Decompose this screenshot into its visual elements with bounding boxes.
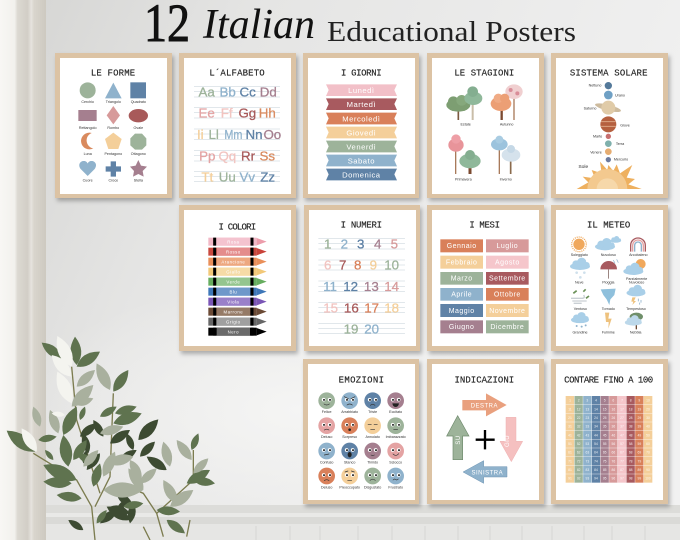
number grid: 36 — [611, 425, 615, 429]
icon: nuvoloso: Nuvoloso — [601, 253, 616, 257]
numbers: 2 — [341, 237, 348, 252]
face labels: Deluso — [321, 485, 332, 489]
face labels: Triste — [368, 410, 377, 414]
number grid: 94 — [594, 477, 598, 481]
number grid: 38 — [629, 425, 633, 429]
month tiles: Maggio — [449, 308, 475, 315]
alphabet letters: Ss — [260, 148, 275, 163]
number grid: 37 — [620, 425, 624, 429]
number grid: 72 — [577, 459, 581, 463]
planets: Giove — [620, 124, 630, 128]
number grid: 20 — [646, 407, 650, 411]
number grid: 45 — [603, 433, 607, 437]
alphabet letters: Vv — [240, 169, 255, 184]
icon: tornado: Tornado — [602, 307, 615, 311]
ruled lines — [318, 238, 405, 334]
numbers: 11 — [323, 279, 337, 294]
heading: i giorni: I GIORNI — [341, 69, 382, 79]
numbers: 8 — [354, 258, 361, 273]
alphabet letters: Oo — [263, 127, 281, 142]
number grid: 63 — [585, 451, 589, 455]
number grid: 96 — [611, 477, 615, 481]
shapes grid: Croce — [108, 179, 118, 183]
number grid: 35 — [603, 425, 607, 429]
number grid: 81 — [568, 468, 572, 472]
number grid: 46 — [611, 433, 615, 437]
number grid: 23 — [585, 416, 589, 420]
number grid: 82 — [577, 468, 581, 472]
number grid: 77 — [620, 459, 624, 463]
face labels: Eccitato — [389, 410, 402, 414]
alphabet letters: Tt — [201, 169, 214, 184]
shapes grid: Ovale — [134, 126, 143, 130]
number grid: 41 — [568, 433, 572, 437]
number grid: 3 — [586, 399, 588, 403]
numbers: 19 — [344, 321, 358, 336]
number grid: 75 — [603, 459, 607, 463]
number grid: 86 — [611, 468, 615, 472]
panel: le stagioni — [427, 53, 544, 198]
number grid: 64 — [594, 451, 598, 455]
number grid: 43 — [585, 433, 589, 437]
number grid: 85 — [603, 468, 607, 472]
month tiles: Luglio — [497, 243, 518, 250]
crayons: Grigio — [226, 319, 241, 324]
number grid: 83 — [585, 468, 589, 472]
number grid: 44 — [594, 433, 598, 437]
planets: Terra — [616, 142, 625, 146]
icon: pioggia: Pioggia — [602, 281, 615, 285]
planets: Mercurio — [614, 158, 628, 162]
number grid: 98 — [629, 477, 633, 481]
numbers — [323, 237, 400, 336]
arrow: giù: GIÙ — [504, 435, 511, 447]
numbers: 1 — [324, 237, 331, 252]
shapes grid: Ottagono — [131, 152, 146, 156]
number grid: 16 — [611, 407, 615, 411]
number grid: 93 — [585, 477, 589, 481]
number grid: 49 — [637, 433, 641, 437]
face labels: Annoiato — [365, 435, 380, 439]
number grid: 71 — [568, 459, 572, 463]
number grid: 15 — [603, 407, 607, 411]
planets: Saturno — [584, 106, 596, 110]
heading: le stagioni: LE STAGIONI — [454, 69, 514, 79]
day ribbons — [326, 84, 397, 180]
number grid: 34 — [594, 425, 598, 429]
number grid: 66 — [611, 451, 615, 455]
icon: temporale: Tempestoso — [626, 307, 646, 311]
face labels: Confuso — [320, 460, 333, 464]
number grid: 19 — [637, 407, 641, 411]
month tiles: Agosto — [495, 259, 520, 266]
alphabet letters: Dd — [260, 85, 277, 100]
face labels: Stanco — [344, 460, 355, 464]
wainscot moulding — [46, 505, 680, 540]
alphabet letters: Rr — [241, 148, 256, 163]
number grid: 95 — [603, 477, 607, 481]
numbers: 13 — [364, 279, 379, 294]
crayons: Arancione — [221, 259, 245, 264]
numbers: 3 — [357, 237, 364, 252]
alphabet letters: Uu — [219, 169, 236, 184]
alphabet letters: Ii — [197, 127, 204, 142]
ruled lines — [194, 87, 280, 182]
day ribbons: Mercoledì — [342, 114, 380, 123]
heading: indicazioni: INDICAZIONI — [454, 375, 514, 385]
panel: il meteo — [551, 205, 668, 351]
face labels: Felice — [322, 410, 332, 414]
number grid: 26 — [611, 416, 615, 420]
month tiles: Gennaio — [447, 243, 477, 250]
planets: Urano — [615, 94, 625, 98]
icon: parzialmente nuvoloso: Parzialmente — [626, 277, 647, 281]
month tiles: Novembre — [489, 308, 525, 315]
planets: Venere — [590, 151, 602, 155]
number grid: 21 — [568, 416, 572, 420]
number grid: 76 — [611, 459, 615, 463]
planets — [584, 82, 630, 162]
wall light — [20, 280, 580, 540]
number grid: 12 — [577, 407, 581, 411]
number grid: 25 — [603, 416, 607, 420]
number grid: 57 — [620, 442, 624, 446]
day ribbons: Martedì — [347, 100, 376, 109]
number grid — [566, 396, 652, 483]
face labels: Disgustato — [364, 485, 381, 489]
number grid: 73 — [585, 459, 589, 463]
number grid: 91 — [568, 477, 572, 481]
number grid: 28 — [629, 416, 633, 420]
title: Educational Posters — [327, 16, 576, 48]
number grid: 14 — [594, 407, 598, 411]
planets: Marte — [593, 134, 602, 138]
number grid: 30 — [646, 416, 650, 420]
heading: sistema solare: SISTEMA SOLARE — [570, 69, 647, 79]
face grid — [318, 392, 404, 484]
alphabet letters: Ll — [208, 127, 219, 142]
panel: emozioni — [303, 359, 419, 504]
panel: le forme — [55, 53, 172, 198]
numbers: 5 — [391, 237, 398, 252]
number grid: 8 — [630, 399, 632, 403]
number grid: 11 — [568, 407, 572, 411]
month tiles: Febbraio — [446, 259, 477, 266]
panel: l'alfabeto — [179, 53, 296, 198]
number grid: 13 — [585, 407, 589, 411]
icon: fulmine: Fulmine — [602, 331, 615, 335]
panel: i numeri — [304, 205, 420, 351]
number grid: 60 — [646, 442, 650, 446]
face labels: Deluso — [321, 435, 332, 439]
planets: Nettuno — [589, 84, 601, 88]
crayons: Blu — [229, 289, 237, 294]
plant — [3, 333, 216, 540]
number grid: 54 — [594, 442, 598, 446]
month tiles — [440, 239, 529, 333]
title: Italian — [202, 2, 315, 48]
number grid: 6 — [612, 399, 614, 403]
number grid: 33 — [585, 425, 589, 429]
number grid: 18 — [629, 407, 633, 411]
number grid: 61 — [568, 451, 572, 455]
alphabet letters: Pp — [199, 148, 215, 163]
shapes grid: Triangolo — [106, 100, 121, 104]
number grid: 40 — [646, 425, 650, 429]
numbers: 17 — [364, 300, 379, 315]
label: sole: Sole — [578, 164, 589, 170]
number grid: 27 — [620, 416, 624, 420]
number grid: 17 — [620, 407, 624, 411]
arrow: sinistra: SINISTRA — [472, 470, 503, 476]
number grid: 24 — [594, 416, 598, 420]
alphabet letters: Mm — [224, 127, 242, 142]
face labels: Imbarazzato — [386, 435, 406, 439]
number grid: 65 — [603, 451, 607, 455]
alphabet letters: Aa — [199, 85, 215, 100]
number grid: 47 — [620, 433, 624, 437]
day ribbons: Venerdì — [346, 142, 376, 151]
shapes grid — [78, 82, 148, 183]
panel: sistema solare — [551, 53, 668, 198]
icon: sole: Soleggiato — [571, 253, 588, 257]
alphabet letters: Zz — [260, 169, 275, 184]
number grid: 97 — [620, 477, 624, 481]
icon: nebbia: Nebbia — [630, 331, 642, 335]
number grid: 50 — [646, 433, 650, 437]
face labels: Timido — [367, 460, 378, 464]
number grid: 92 — [577, 477, 581, 481]
number grid: 39 — [637, 425, 641, 429]
numbers: 6 — [324, 258, 331, 273]
numbers: 20 — [364, 321, 379, 336]
number grid: 22 — [577, 416, 581, 420]
panel: i colori — [179, 205, 296, 351]
icon: arcobaleno: Arcobaleno — [629, 253, 648, 257]
icon: sun — [577, 162, 642, 189]
number grid: 70 — [646, 451, 650, 455]
arrow: destra: DESTRA — [471, 403, 498, 409]
trees: inverno: Inverno — [500, 177, 512, 181]
number grid: 90 — [646, 468, 650, 472]
icon: neve: Neve — [575, 281, 584, 285]
number grid: 78 — [629, 459, 633, 463]
number grid: 99 — [637, 477, 641, 481]
alphabet letters: Gg — [238, 106, 256, 121]
number grid: 4 — [595, 399, 597, 403]
arrow: su: SU — [456, 435, 462, 445]
month tiles: Giugno — [449, 324, 474, 331]
number grid: 1 — [569, 399, 571, 403]
panel: contare fino a 100 — [551, 359, 668, 504]
number grid: 31 — [568, 425, 572, 429]
number grid: 88 — [629, 468, 633, 472]
face labels: Preoccupato — [339, 485, 360, 489]
number grid: 56 — [611, 442, 615, 446]
crayons: Marrone — [224, 309, 243, 314]
face labels — [320, 410, 406, 489]
shapes grid: Luna — [84, 152, 93, 156]
panel: i mesi — [427, 205, 544, 351]
number grid: 67 — [620, 451, 624, 455]
number grid: 87 — [620, 468, 624, 472]
heading: l'alfabeto: L´ALFABETO — [209, 69, 265, 79]
day ribbons: Lunedì — [348, 86, 375, 95]
number grid: 79 — [637, 459, 641, 463]
alphabet letters: Ff — [221, 106, 233, 121]
number grid: 89 — [637, 468, 641, 472]
alphabet letters — [197, 85, 281, 184]
trees: primavera: Primavera — [455, 177, 473, 181]
day ribbons: Sabato — [348, 156, 375, 165]
heading: le forme: LE FORME — [91, 69, 135, 79]
number grid: 100 — [645, 477, 651, 481]
heading: emozioni: EMOZIONI — [339, 375, 384, 385]
number grid: 48 — [629, 433, 633, 437]
icon: parzialmente nuvoloso — [623, 259, 647, 284]
shapes grid: Quadrato — [131, 100, 146, 104]
number grid: 7 — [621, 399, 623, 403]
number grid: 58 — [629, 442, 633, 446]
day ribbons: Giovedì — [346, 128, 376, 137]
numbers: 18 — [384, 300, 399, 315]
crayons: Giallo — [226, 269, 240, 274]
month tiles: Aprile — [451, 292, 472, 299]
title — [144, 0, 576, 53]
trees: autunno: Autunno — [500, 123, 513, 127]
face labels: Arrabbiato — [341, 410, 358, 414]
panel: indicazioni — [427, 359, 544, 504]
number grid: 59 — [637, 442, 641, 446]
numbers: 7 — [339, 258, 346, 273]
month tiles: Marzo — [451, 276, 473, 283]
numbers: 12 — [343, 279, 358, 294]
shapes grid: Rettangolo — [79, 126, 97, 130]
number grid: 32 — [577, 425, 581, 429]
shapes grid: Stella — [134, 179, 144, 183]
icon: vento: Ventoso — [574, 307, 587, 311]
number grid: 62 — [577, 451, 581, 455]
number grid: 74 — [594, 459, 598, 463]
month tiles: Settembre — [489, 276, 526, 283]
number grid: 5 — [604, 399, 606, 403]
day ribbons: Domenica — [342, 170, 381, 179]
crayons: Verde — [226, 279, 240, 284]
number grid: 2 — [578, 399, 580, 403]
number grid: 68 — [629, 451, 633, 455]
heading: i numeri: I NUMERI — [341, 221, 382, 231]
number grid: 84 — [594, 468, 598, 472]
heading: i mesi: I MESI — [469, 221, 500, 231]
number grid: 53 — [585, 442, 589, 446]
number grid: 10 — [646, 399, 650, 403]
shapes grid: Cuore — [83, 179, 93, 183]
number grid: 9 — [638, 399, 640, 403]
numbers: 9 — [370, 258, 377, 273]
panel: i giorni — [303, 53, 419, 198]
heading: il meteo: IL METEO — [587, 221, 630, 231]
month tiles: Dicembre — [490, 324, 524, 331]
crayons: Rosso — [226, 249, 241, 254]
number grid: 55 — [603, 442, 607, 446]
shapes grid: Pentagono — [104, 152, 122, 156]
alphabet letters: Nn — [245, 127, 263, 142]
alphabet letters: Ee — [199, 106, 215, 121]
plus sign — [476, 430, 495, 449]
number grid: 42 — [577, 433, 581, 437]
month tiles: Ottobre — [494, 292, 521, 299]
face labels: Frustrato — [388, 485, 403, 489]
number grid: 69 — [637, 451, 641, 455]
number grid: 52 — [577, 442, 581, 446]
face labels: Sorpreso — [342, 435, 357, 439]
crayons: Rosa — [227, 239, 239, 244]
crayons: Nero — [228, 329, 239, 334]
alphabet letters: Bb — [220, 85, 236, 100]
numbers: 16 — [344, 300, 359, 315]
crayons — [208, 238, 267, 336]
heading: i colori: I COLORI — [218, 222, 256, 232]
crayons: Viola — [227, 299, 239, 304]
numbers: 14 — [384, 279, 400, 294]
face labels: Sciocco — [389, 460, 402, 464]
numbers: 4 — [374, 237, 382, 252]
trees: estate: Estate — [460, 123, 471, 127]
alphabet letters: Cc — [240, 85, 256, 100]
icon: parzialmente nuvoloso: Nuvoloso — [629, 280, 644, 284]
numbers: 10 — [384, 258, 399, 273]
curtain — [0, 0, 46, 540]
number grid: 51 — [568, 442, 572, 446]
heading: contare fino a 100: CONTARE FINO A 100 — [564, 375, 653, 385]
icon: grandine: Grandine — [572, 331, 588, 335]
shapes grid: Rombo — [107, 126, 119, 130]
alphabet letters: Qq — [218, 148, 236, 163]
number grid: 29 — [637, 416, 641, 420]
number grid: 80 — [646, 459, 650, 463]
numbers: 15 — [323, 300, 338, 315]
shapes grid: Cerchio — [81, 100, 94, 104]
alphabet letters: Hh — [259, 106, 276, 121]
